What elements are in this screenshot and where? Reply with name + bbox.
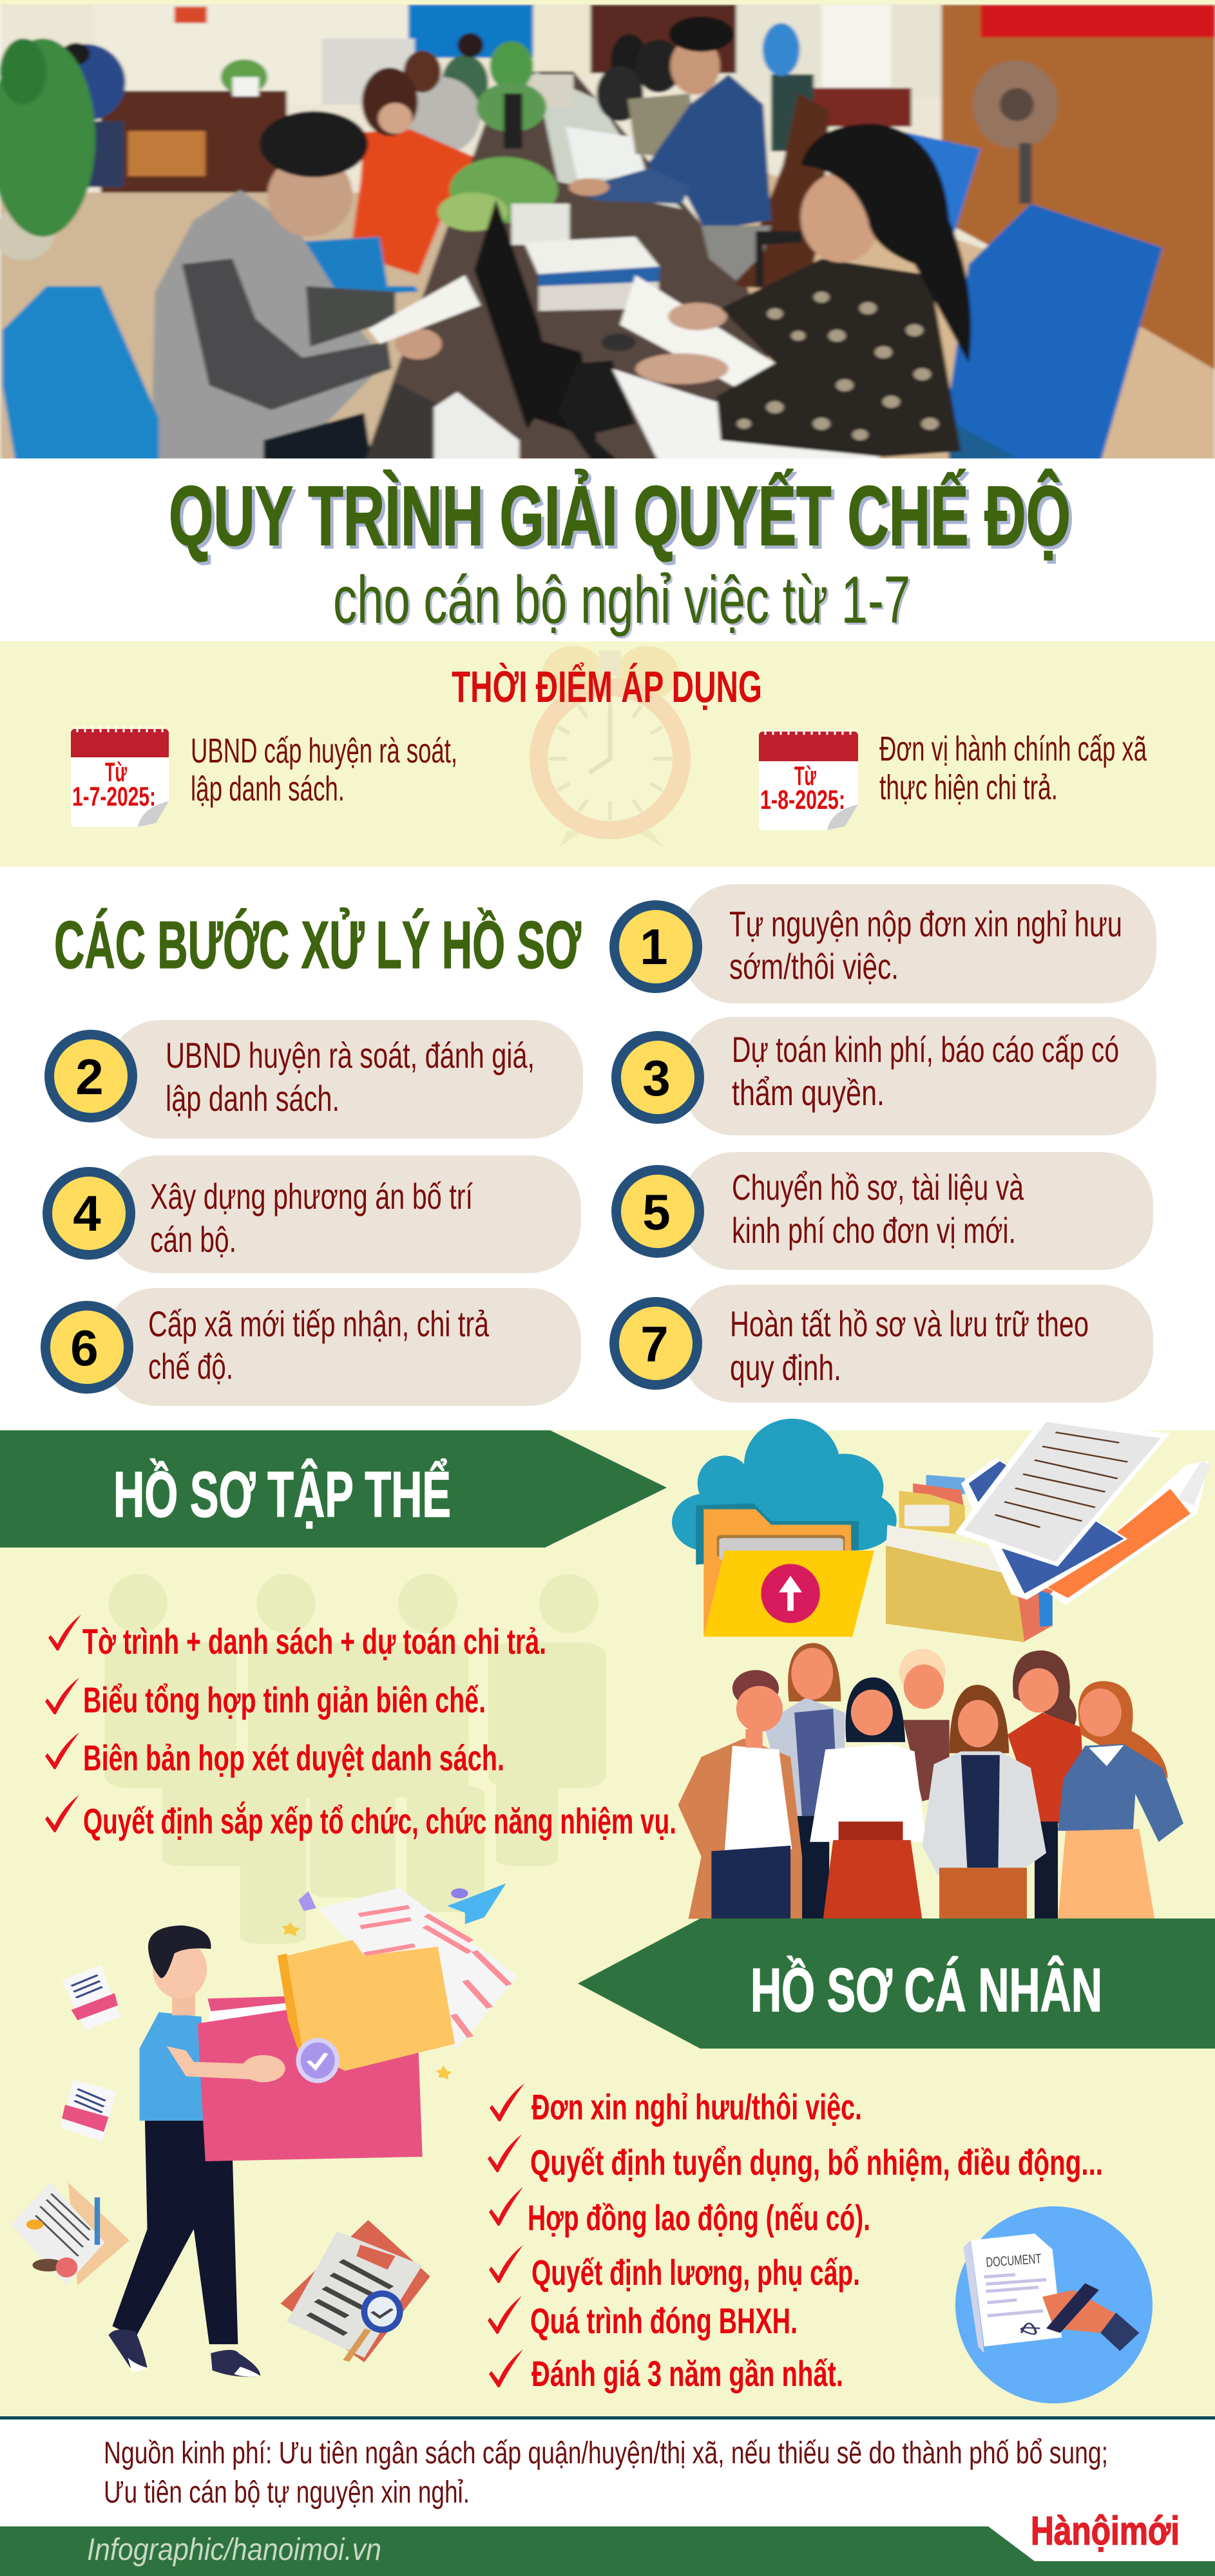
step 2: UBND huyện rà soát, đánh giá, <box>166 1035 535 1075</box>
step 6 <box>41 1288 581 1406</box>
checklist: personal documents: Hợp đồng lao động (nếu có). <box>528 2197 870 2238</box>
divider line <box>0 2416 1215 2420</box>
photo: office staff working at desks <box>0 0 1215 462</box>
icon: alarm clock watermark <box>539 646 682 848</box>
step 2: 2 <box>75 1048 104 1105</box>
step 3: thẩm quyền. <box>732 1072 885 1113</box>
step 2 <box>44 1020 583 1139</box>
checklist: collective documents: Quyết định sắp xếp tổ chức, chức năng nhiệm vụ. <box>83 1801 676 1841</box>
step 5 <box>611 1152 1153 1270</box>
checklist: collective documents: Biểu tổng hợp tinh giản biên chế. <box>83 1680 486 1720</box>
step 4: Xây dựng phương án bố trí <box>150 1176 473 1217</box>
checklist: personal documents: Đơn xin nghỉ hưu/thôi việc. <box>531 2087 862 2127</box>
icon: signing document in blue circle <box>955 2206 1153 2403</box>
step 2: lập danh sách. <box>166 1078 340 1119</box>
step 1 <box>609 884 1156 1003</box>
text block: funding source note <box>104 2436 1108 2510</box>
banner: hồ sơ tập thể: HỒ SƠ TẬP THỂ <box>113 1459 451 1531</box>
panel: application timing <box>0 641 1215 867</box>
logo: Hànộimới: Hànộimới <box>1031 2509 1180 2553</box>
heading: các bước xử lý hồ sơ: CÁC BƯỚC XỬ LÝ HỒ SƠ <box>54 907 581 983</box>
icon: calendar 1-8-2025: 1-8-2025: <box>760 784 845 815</box>
checklist: personal documents: Quyết định lương, phụ cấp. <box>531 2252 860 2293</box>
step 3: 3 <box>642 1050 671 1106</box>
footer band <box>0 2526 1215 2576</box>
step 7: 7 <box>640 1316 669 1372</box>
icon: folder with papers <box>886 1417 1210 1642</box>
checklist: personal documents: Đánh giá 3 năm gần nhất. <box>531 2353 843 2394</box>
step 5: kinh phí cho đơn vị mới. <box>732 1210 1016 1251</box>
text block: funding source note: Ưu tiên cán bộ tự nguyện xin nghỉ. <box>104 2476 470 2510</box>
footer band: Infographic/hanoimoi.vn <box>87 2533 381 2567</box>
watermark: people silhouette <box>104 1574 606 1944</box>
text block: district review <box>191 732 457 808</box>
icon: cloud upload folder <box>672 1419 897 1637</box>
icon: calendar 1-8-2025 <box>759 729 858 830</box>
panel: document sections background <box>0 1430 1215 2416</box>
icon: calendar 1-7-2025: Từ <box>105 757 127 787</box>
icon: calendar 1-7-2025: 1-7-2025: <box>72 781 156 811</box>
checklist: collective documents <box>45 1615 676 1841</box>
banner: hồ sơ cá nhân <box>578 1918 1215 2049</box>
step 7 <box>609 1285 1153 1403</box>
step 6: chế độ. <box>148 1346 233 1387</box>
checklist: personal documents: Quá trình đóng BHXH. <box>530 2300 798 2341</box>
step 4: cán bộ. <box>150 1219 236 1260</box>
step 5: 5 <box>642 1184 671 1240</box>
checklist: collective documents: Biên bản họp xét duyệt danh sách. <box>83 1738 504 1778</box>
step 4 <box>43 1155 581 1273</box>
icon: calendar 1-7-2025 <box>71 726 169 827</box>
step 6: 6 <box>70 1320 99 1376</box>
step 1: 1 <box>640 918 668 975</box>
text block: district review: UBND cấp huyện rà soát, <box>191 732 457 770</box>
banner: hồ sơ tập thể <box>0 1430 667 1548</box>
panel: processing steps <box>41 884 1156 1406</box>
step 4: 4 <box>73 1185 101 1242</box>
subtitle: cho cán bộ nghỉ việc từ 1-7 <box>333 563 910 638</box>
step 7: Hoàn tất hồ sơ và lưu trữ theo <box>730 1303 1089 1344</box>
step 5: Chuyển hồ sơ, tài liệu và <box>732 1167 1024 1208</box>
illustration: man carrying folders <box>12 1884 518 2377</box>
step 6: Cấp xã mới tiếp nhận, chi trả <box>148 1303 490 1344</box>
icon: calendar 1-8-2025: Từ <box>794 761 816 791</box>
heading: thời điểm áp dụng: THỜI ĐIỂM ÁP DỤNG <box>452 662 762 712</box>
step 7: quy định. <box>730 1347 841 1388</box>
checklist: collective documents: Tờ trình + danh sách + dự toán chi trả. <box>82 1621 546 1662</box>
text block: commune payment <box>879 730 1147 807</box>
step 1: sớm/thôi việc. <box>729 946 899 987</box>
text block: commune payment: thực hiện chi trả. <box>879 768 1058 807</box>
illustration: group of people <box>678 1643 1183 1920</box>
checklist: personal documents <box>488 2083 1103 2394</box>
text block: district review: lập danh sách. <box>191 770 345 808</box>
icon: signing document in blue circle: DOCUMENT <box>986 2251 1042 2270</box>
step 3 <box>611 1017 1156 1135</box>
